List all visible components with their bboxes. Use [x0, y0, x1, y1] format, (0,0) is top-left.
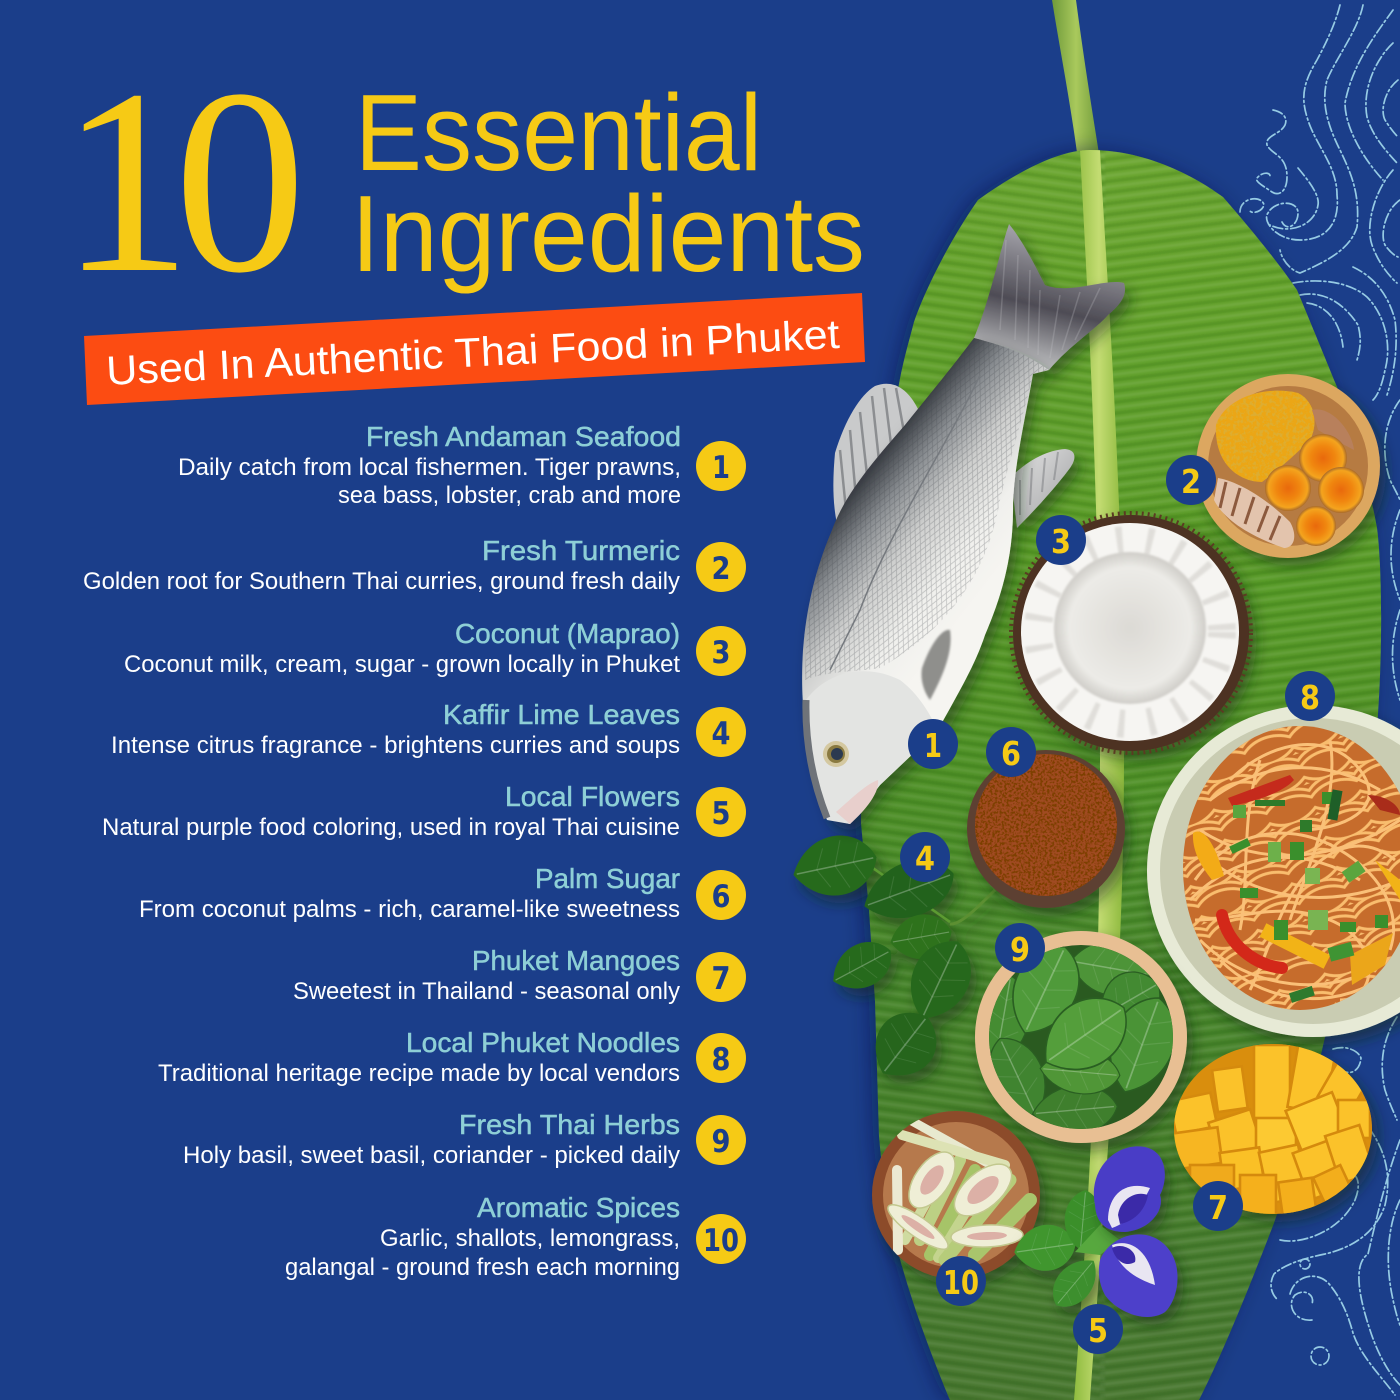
number badge: 5: [712, 796, 730, 832]
number badge: [696, 787, 746, 837]
herb leaves: [989, 945, 1173, 1129]
number badge: [696, 952, 746, 1002]
red peppers: [1228, 775, 1294, 806]
fish eye: [823, 741, 849, 767]
heading: Local Flowers: [505, 781, 680, 812]
marker 6: [986, 727, 1036, 777]
number badge: [696, 1033, 746, 1083]
bowl: [872, 1111, 1040, 1279]
marker 10: 10: [943, 1263, 979, 1302]
tail fin: [974, 224, 1125, 370]
marker 7: [1193, 1181, 1243, 1231]
subtitle text: Used In Authentic Thai Food in Phuket: [105, 311, 841, 394]
description: From coconut palms - rich, caramel-like sweetness: [139, 896, 680, 923]
description: [285, 1225, 680, 1281]
coconut shell: [1011, 513, 1251, 753]
heading: Local Phuket Noodles: [406, 1027, 680, 1058]
icon: coconut half: [1011, 513, 1251, 753]
title line Ingredients: Ingredients: [351, 173, 865, 295]
bowl: [1196, 374, 1380, 558]
marker 9: [995, 923, 1045, 973]
marker 2: [1166, 455, 1216, 505]
description: [178, 454, 681, 509]
number badge: 6: [712, 879, 730, 915]
coconut flesh: [1021, 523, 1239, 741]
lemongrass stalks: [897, 1120, 1030, 1260]
description: Traditional heritage recipe made by local vendors: [158, 1060, 680, 1087]
coconut ribs: [1038, 540, 1222, 724]
fish body: [802, 338, 1049, 824]
number badge: [696, 1214, 746, 1264]
sugar: [975, 754, 1117, 896]
heading: Coconut (Maprao): [455, 618, 680, 649]
marker 2: 2: [1181, 462, 1201, 501]
icon: whole sea bass fish: [802, 224, 1125, 824]
description: Holy basil, sweet basil, coriander - picked daily: [183, 1142, 680, 1169]
mango base: [1174, 1044, 1372, 1214]
marker 5: 5: [1088, 1311, 1108, 1350]
list item 9: [183, 1109, 746, 1169]
decorative dashed wave pattern: [1240, 5, 1400, 1395]
turmeric slices: [1265, 465, 1311, 511]
stem: [1052, 0, 1100, 160]
number badge: [696, 542, 746, 592]
icon: lemongrass bowl: [872, 1111, 1040, 1279]
heading: Palm Sugar: [535, 863, 680, 894]
marker 1: [908, 719, 958, 769]
pectoral fin: [1011, 449, 1074, 528]
heading: Fresh Turmeric: [482, 535, 680, 566]
bowl: [1147, 705, 1400, 1037]
title line Essential: Essential: [355, 72, 762, 194]
marker 3: 3: [1051, 522, 1071, 561]
yellow peppers: [1193, 831, 1224, 880]
heading: Fresh Andaman Seafood: [366, 421, 681, 452]
number badge: 2: [712, 551, 730, 587]
number badge: [696, 870, 746, 920]
number badge: [696, 626, 746, 676]
flower stem: [1075, 1225, 1120, 1255]
number badge: 8: [712, 1042, 730, 1078]
icon: butterfly pea flowers: [1011, 1146, 1178, 1317]
title: [60, 36, 865, 328]
fish belly fin: [921, 630, 951, 700]
dorsal fin: [833, 384, 918, 524]
number badge: 9: [712, 1124, 730, 1160]
icon: mango hedgehog cut: [1169, 1043, 1375, 1216]
number badge: 4: [712, 716, 730, 752]
number badge: 7: [712, 961, 730, 997]
list item 6: [139, 863, 746, 923]
marker 6: 6: [1001, 734, 1021, 773]
icon: noodle bowl: [1147, 705, 1400, 1037]
marker 3: [1036, 515, 1086, 565]
description: Sweetest in Thailand - seasonal only: [293, 978, 680, 1005]
list item 7: [293, 945, 746, 1005]
ingredient list: [83, 421, 746, 1281]
leaf blade: [861, 150, 1381, 1400]
noodles: [1183, 726, 1400, 1010]
fish scales: [805, 338, 1049, 680]
list item 2: [83, 535, 746, 595]
marker 7: 7: [1208, 1188, 1228, 1227]
turmeric root: [1214, 409, 1354, 548]
icon: kaffir lime leaves: [787, 828, 995, 1092]
number badge: 3: [712, 635, 730, 671]
icon: turmeric bowl: [1196, 374, 1380, 558]
marker 8: [1285, 671, 1335, 721]
description: sea bass, lobster, crab and more: [338, 482, 681, 509]
description: Daily catch from local fishermen. Tiger prawns,: [178, 454, 681, 481]
number badge: [696, 1115, 746, 1165]
fish lateral line: [830, 375, 980, 670]
banana leaf: [850, 0, 1400, 1400]
list item 10: [285, 1192, 746, 1281]
number markers on ingredients: [900, 455, 1335, 1354]
description: Garlic, shallots, lemongrass,: [380, 1225, 680, 1252]
description: galangal - ground fresh each morning: [285, 1254, 680, 1281]
fish mouth: [836, 780, 878, 824]
title number 10: 10: [60, 36, 306, 328]
heading: Kaffir Lime Leaves: [443, 699, 680, 730]
green onions: [1229, 789, 1388, 1003]
marker 9: 9: [1010, 930, 1030, 969]
number badge: 10: [703, 1223, 739, 1259]
heading: Phuket Mangoes: [472, 945, 680, 976]
marker 1: 1: [924, 726, 942, 765]
lemongrass slices: [883, 1144, 1023, 1256]
number badge: [696, 441, 746, 491]
bottom flower: [1099, 1234, 1178, 1317]
mango cubes: [1169, 1043, 1375, 1216]
turmeric powder: [1216, 391, 1314, 482]
list item 8: [158, 1027, 746, 1087]
number badge: 1: [712, 450, 730, 486]
marker 4: [900, 832, 950, 882]
coconut centre: [1054, 552, 1206, 704]
flower leaves: [1011, 1189, 1107, 1317]
list item 4: [111, 699, 746, 759]
subtitle banner: [84, 293, 865, 405]
heading: Fresh Thai Herbs: [459, 1109, 680, 1140]
icon: herb bowl: [970, 931, 1188, 1143]
leaf veins: [850, 140, 1400, 1400]
top flower: [1094, 1146, 1165, 1232]
number badge: [696, 707, 746, 757]
marker 8: 8: [1300, 678, 1320, 717]
bowl: [967, 750, 1125, 908]
heading: Aromatic Spices: [477, 1192, 680, 1223]
description: Intense citrus fragrance - brightens curries and soups: [111, 732, 680, 759]
description: Natural purple food coloring, used in royal Thai cuisine: [102, 814, 680, 841]
description: Golden root for Southern Thai curries, ground fresh daily: [83, 568, 680, 595]
marker 5: [1073, 1304, 1123, 1354]
list item 5: [102, 781, 746, 841]
bowl: [975, 931, 1187, 1143]
icon: palm sugar bowl: [967, 750, 1125, 908]
list item 1: [178, 421, 746, 509]
marker 10: [936, 1256, 986, 1306]
fish head: [806, 671, 938, 824]
marker 4: 4: [915, 839, 935, 878]
description: Coconut milk, cream, sugar - grown locally in Phuket: [124, 651, 680, 678]
list item 3: [124, 618, 746, 678]
